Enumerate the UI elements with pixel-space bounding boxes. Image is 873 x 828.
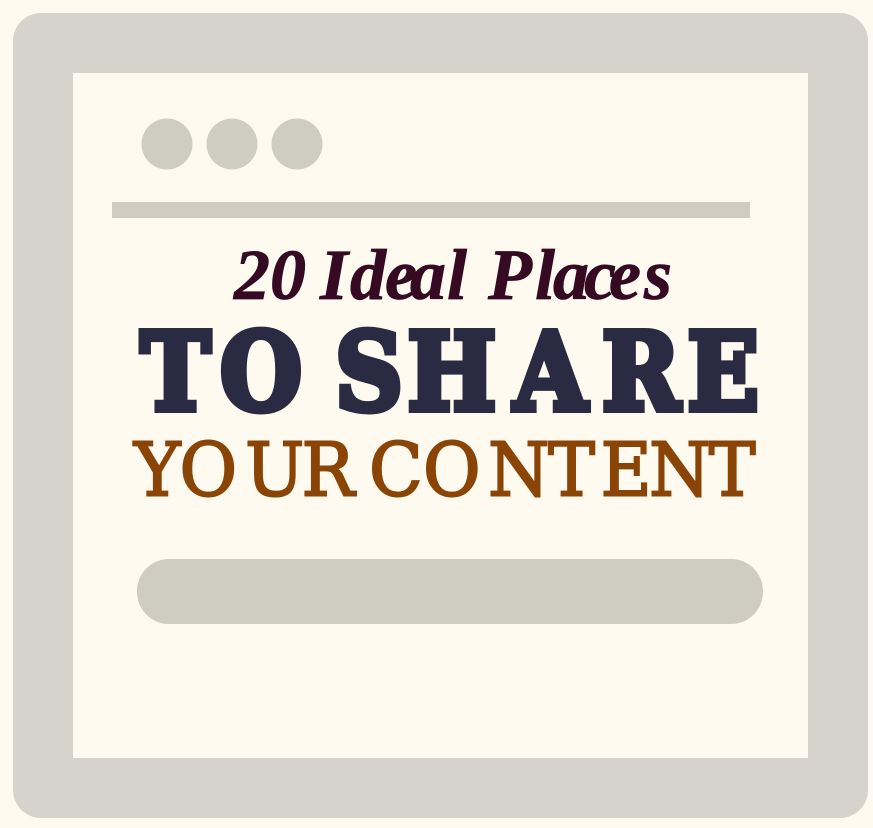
title line two: slab bold: TO SHARE [141,309,759,435]
title line three: slab regular: YOUR CONTENT [133,428,756,514]
button pill [137,559,763,624]
title line one: script: 20 Ideal Places [233,235,672,315]
window control dots [142,118,322,170]
address bar line [112,202,750,218]
